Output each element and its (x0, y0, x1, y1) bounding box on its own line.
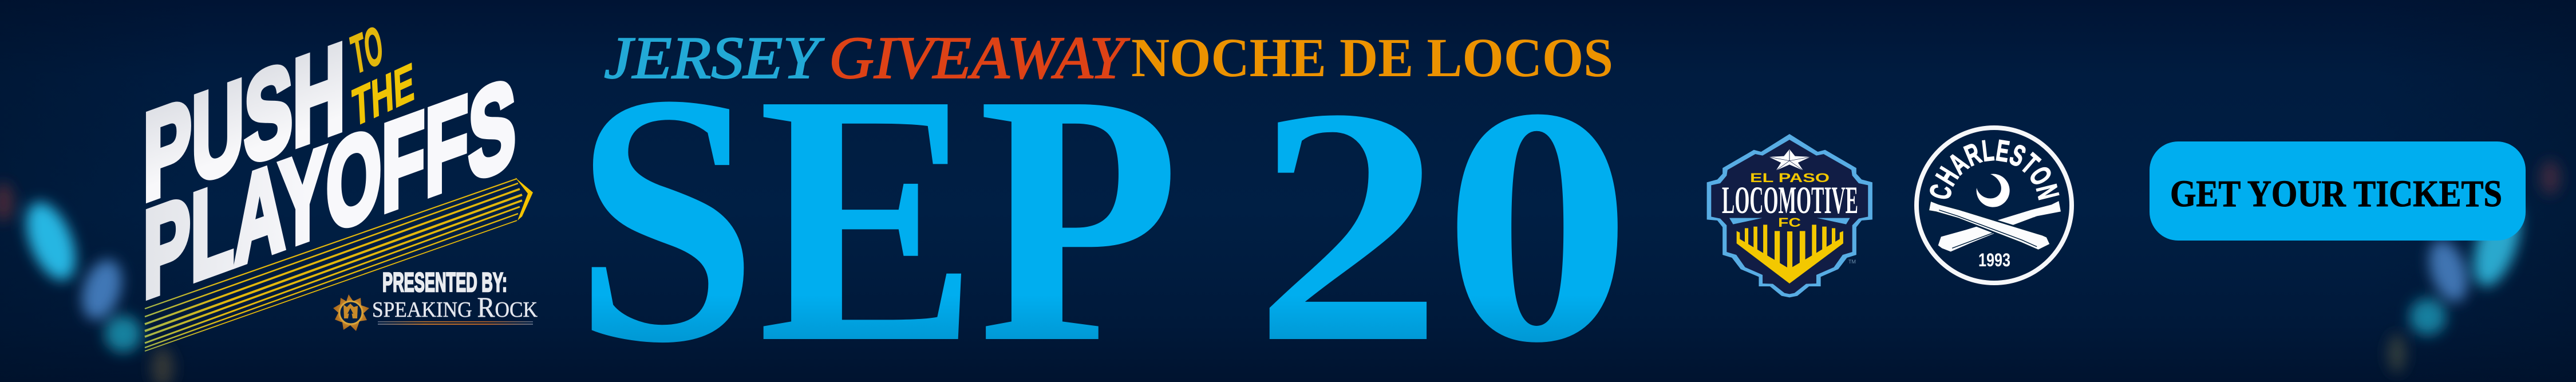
button: get your tickets (2150, 141, 2526, 241)
logo: Charleston (1914, 125, 2074, 285)
text: charleston: CHARLESTON (1930, 140, 2060, 200)
text: trademark: TM (1848, 259, 1856, 265)
heading: THE: THE (351, 51, 416, 139)
striped arrow (145, 178, 533, 351)
logo: Push to the Playoffs (143, 14, 533, 351)
blurred lights left (0, 183, 174, 382)
wordmark: SPEAKING ROCK (372, 291, 538, 323)
promo line (604, 24, 1613, 91)
text: el paso: EL PASO (1750, 171, 1830, 185)
logo: El Paso Locomotive FC: LOCOMOTIVE (1722, 178, 1858, 222)
icon: crescent (1977, 174, 2010, 207)
date (574, 20, 1632, 382)
crest shapes (1707, 134, 1872, 297)
button: get your tickets: GET YOUR TICKETS (2170, 173, 2502, 215)
text: giveaway: GIVEAWAY (829, 24, 1130, 91)
icon: sun emblem (333, 294, 369, 331)
icon: crossed cannons (1928, 200, 2061, 251)
text: 1993: 1993 (1978, 250, 2010, 270)
sponsor: Speaking Rock (333, 291, 538, 331)
logo: El Paso Locomotive FC (1707, 134, 1872, 297)
text: presented by: PRESENTED BY: (382, 267, 507, 297)
text: fc: FC (1778, 215, 1801, 230)
blurred lights right (2388, 160, 2561, 373)
underline rule (378, 321, 533, 325)
ring (1917, 128, 2072, 283)
text: jersey: JERSEY (604, 24, 824, 91)
text: noche de locos: NOCHE DE LOCOS (1131, 27, 1613, 88)
